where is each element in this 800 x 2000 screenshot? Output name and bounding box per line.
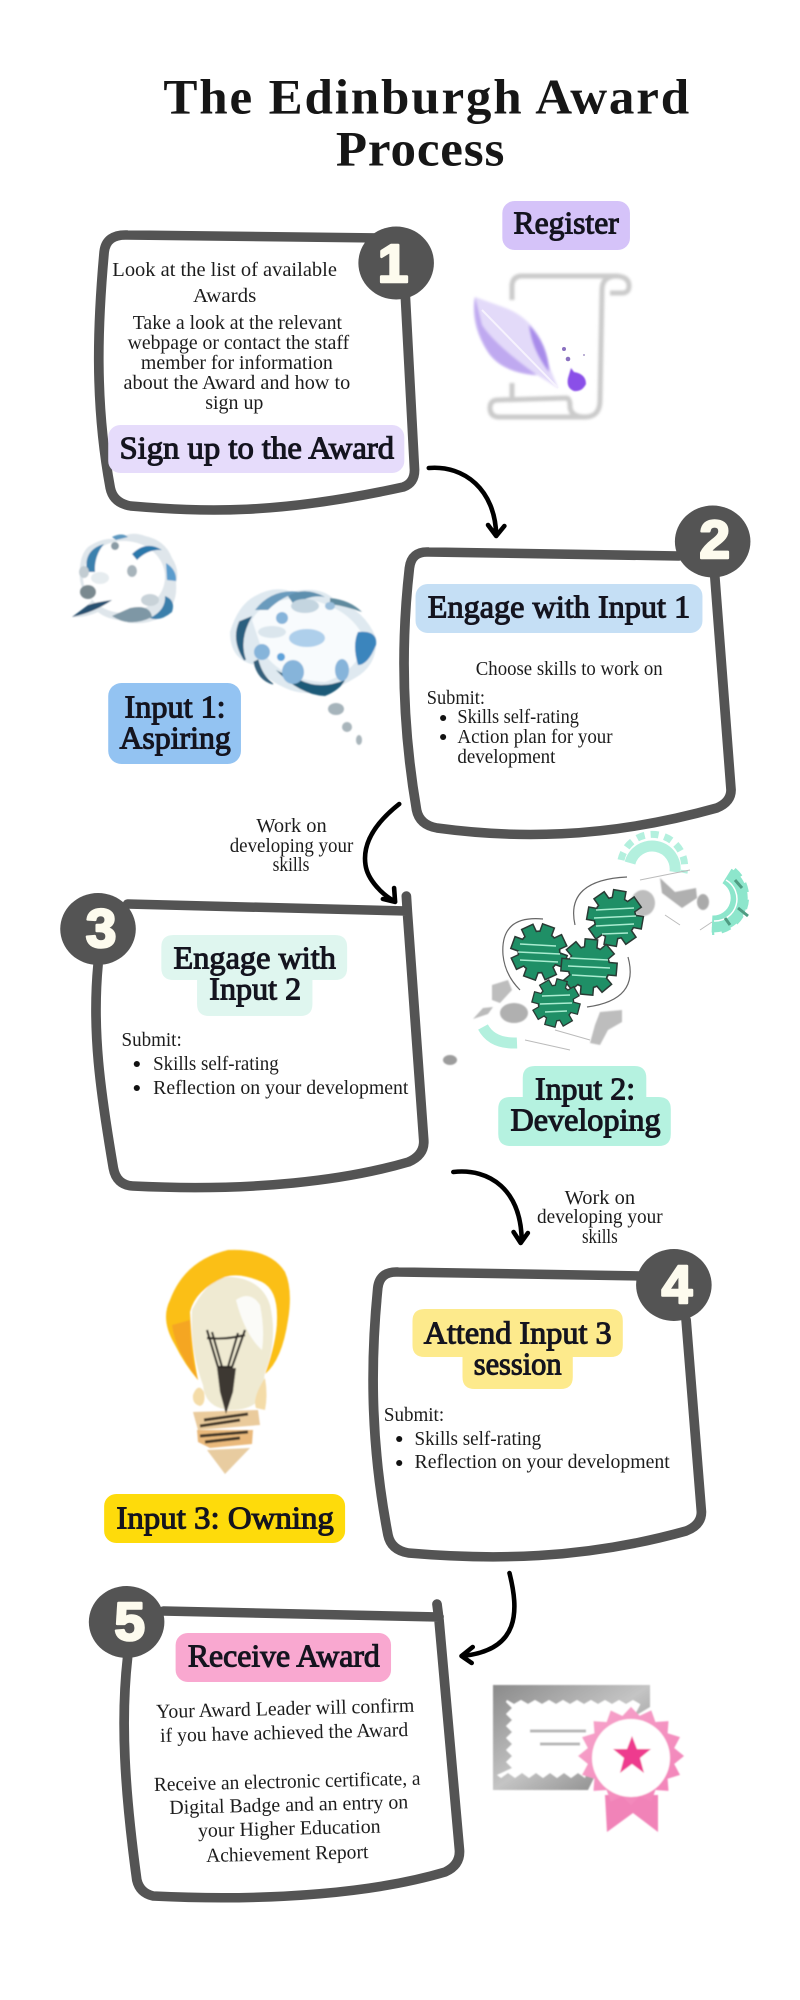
step 1 text: about the Award and how to bbox=[124, 372, 350, 394]
pill: Engage with Input 1 bbox=[416, 584, 702, 633]
step number 3: 3 bbox=[86, 899, 116, 959]
illustration: thought cloud bbox=[230, 589, 376, 745]
pill: Engage with Input 2: Engage with bbox=[174, 940, 336, 975]
step 4 text bbox=[384, 1404, 670, 1473]
pill: Receive Award: Receive Award bbox=[188, 1638, 380, 1673]
step number 5 bbox=[89, 1586, 164, 1658]
arrow: step 2 to step 3 bbox=[365, 804, 399, 902]
step 5 text: Receive an electronic certificate, a bbox=[154, 1768, 421, 1796]
caption: work on developing your skills bbox=[537, 1187, 663, 1248]
teal gear right bbox=[712, 871, 748, 931]
step number 2 bbox=[675, 506, 750, 578]
step number 5: 5 bbox=[114, 1592, 145, 1652]
caption: work on developing your skills bbox=[230, 815, 354, 876]
step 3 text bbox=[121, 1029, 409, 1099]
step 2 text: Choose skills to work on bbox=[476, 658, 663, 680]
pill: Register: Register bbox=[514, 205, 619, 240]
panel: step 2 bbox=[404, 506, 750, 835]
step number 4: 4 bbox=[662, 1255, 693, 1315]
step 4 text: Skills self-rating bbox=[415, 1428, 541, 1450]
illustration: light bulb bbox=[166, 1250, 290, 1474]
pill: Engage with Input 2 bbox=[161, 935, 347, 1016]
step 5 text: Your Award Leader will confirm bbox=[156, 1695, 415, 1723]
step 1 text bbox=[112, 259, 350, 414]
step 2 text bbox=[427, 658, 663, 768]
step 5 text: Achievement Report bbox=[206, 1841, 369, 1867]
title bbox=[163, 69, 689, 176]
step 1 text: webpage or contact the staff bbox=[128, 332, 349, 354]
illustration: speech cloud bbox=[72, 534, 177, 623]
step 5 text: your Higher Education bbox=[198, 1816, 381, 1842]
illustration: gears bbox=[60, 69, 750, 1898]
pill: Sign up to the Award: Sign up to the Award bbox=[119, 430, 394, 465]
pill: Input 3 Owning bbox=[104, 1494, 345, 1543]
step number 1: 1 bbox=[378, 234, 408, 294]
title: The Edinburgh Award bbox=[163, 69, 689, 124]
panel: step 1 bbox=[99, 226, 434, 510]
arrow: step 1 to step 2 bbox=[429, 468, 504, 536]
arrow: step 3 to step 4 bbox=[453, 1172, 528, 1243]
step 1 text: Awards bbox=[193, 285, 256, 307]
caption: work on developing your skills: Work on bbox=[256, 815, 327, 837]
arrow: step 4 to step 5 bbox=[461, 1573, 514, 1663]
caption: work on developing your skills: skills bbox=[582, 1226, 618, 1248]
pill: Register bbox=[502, 201, 630, 250]
step 5 text: Digital Badge and an entry on bbox=[169, 1791, 408, 1819]
step number 3 bbox=[60, 893, 136, 965]
step 1 text: Look at the list of available bbox=[112, 259, 337, 281]
step number 2: 2 bbox=[699, 510, 730, 570]
step 1 text: member for information bbox=[141, 352, 333, 374]
step number 4 bbox=[636, 1249, 712, 1321]
pill: Attend Input 3 session: Attend Input 3 bbox=[424, 1315, 612, 1350]
pill: Input 1 Aspiring: Aspiring bbox=[119, 720, 231, 755]
step 2 text: Action plan for your bbox=[457, 726, 613, 748]
caption: work on developing your skills: developing your bbox=[537, 1206, 663, 1228]
illustration: certificate with rosette bbox=[493, 1685, 684, 1832]
step 3 text: Reflection on your development bbox=[153, 1077, 409, 1099]
caption: work on developing your skills: skills bbox=[273, 854, 309, 876]
pill: Input 1 Aspiring: Input 1: bbox=[125, 689, 226, 724]
step 3 text: Submit: bbox=[121, 1029, 182, 1051]
pill: Engage with Input 2: Input 2 bbox=[209, 971, 301, 1006]
step 3 text: Skills self-rating bbox=[153, 1053, 279, 1075]
pill: Input 2 Developing: Input 2: bbox=[535, 1071, 635, 1106]
panel: step 3 bbox=[60, 893, 424, 1188]
pill: Engage with Input 1: Engage with Input 1 bbox=[428, 589, 690, 624]
pill: Input 1 Aspiring bbox=[108, 683, 241, 764]
step 1 text: sign up bbox=[205, 392, 263, 414]
panel: step 5 bbox=[89, 1586, 460, 1898]
step 1 text: Take a look at the relevant bbox=[133, 312, 342, 334]
pill: Input 2 Developing: Developing bbox=[511, 1102, 661, 1137]
pill: Input 3 Owning: Input 3: Owning bbox=[116, 1500, 334, 1535]
step 4 text: Reflection on your development bbox=[415, 1451, 670, 1473]
teal gear bottom bbox=[483, 1027, 517, 1043]
teal gear top bbox=[621, 834, 685, 873]
pill: Receive Award bbox=[176, 1633, 391, 1682]
step 2 text: Submit: bbox=[427, 687, 485, 709]
caption: work on developing your skills: developing your bbox=[230, 835, 354, 857]
step 4 text: Submit: bbox=[384, 1404, 444, 1426]
panel: step 4 bbox=[373, 1249, 712, 1557]
pill: Input 2 Developing bbox=[498, 1066, 671, 1146]
title: Process bbox=[336, 121, 504, 176]
step 5 text: if you have achieved the Award bbox=[160, 1719, 408, 1747]
step 5 text bbox=[154, 1695, 421, 1867]
caption: work on developing your skills: Work on bbox=[565, 1187, 635, 1209]
green gears bbox=[503, 870, 712, 1050]
pill: Attend Input 3 session: session bbox=[474, 1346, 562, 1381]
step 2 text: Skills self-rating bbox=[457, 706, 579, 728]
step number 1 bbox=[358, 226, 434, 300]
pill: Sign up to the Award bbox=[108, 425, 404, 473]
step 2 text: development bbox=[457, 746, 556, 768]
pill: Attend Input 3 session bbox=[412, 1309, 623, 1389]
illustration: quill and scroll bbox=[474, 276, 629, 417]
